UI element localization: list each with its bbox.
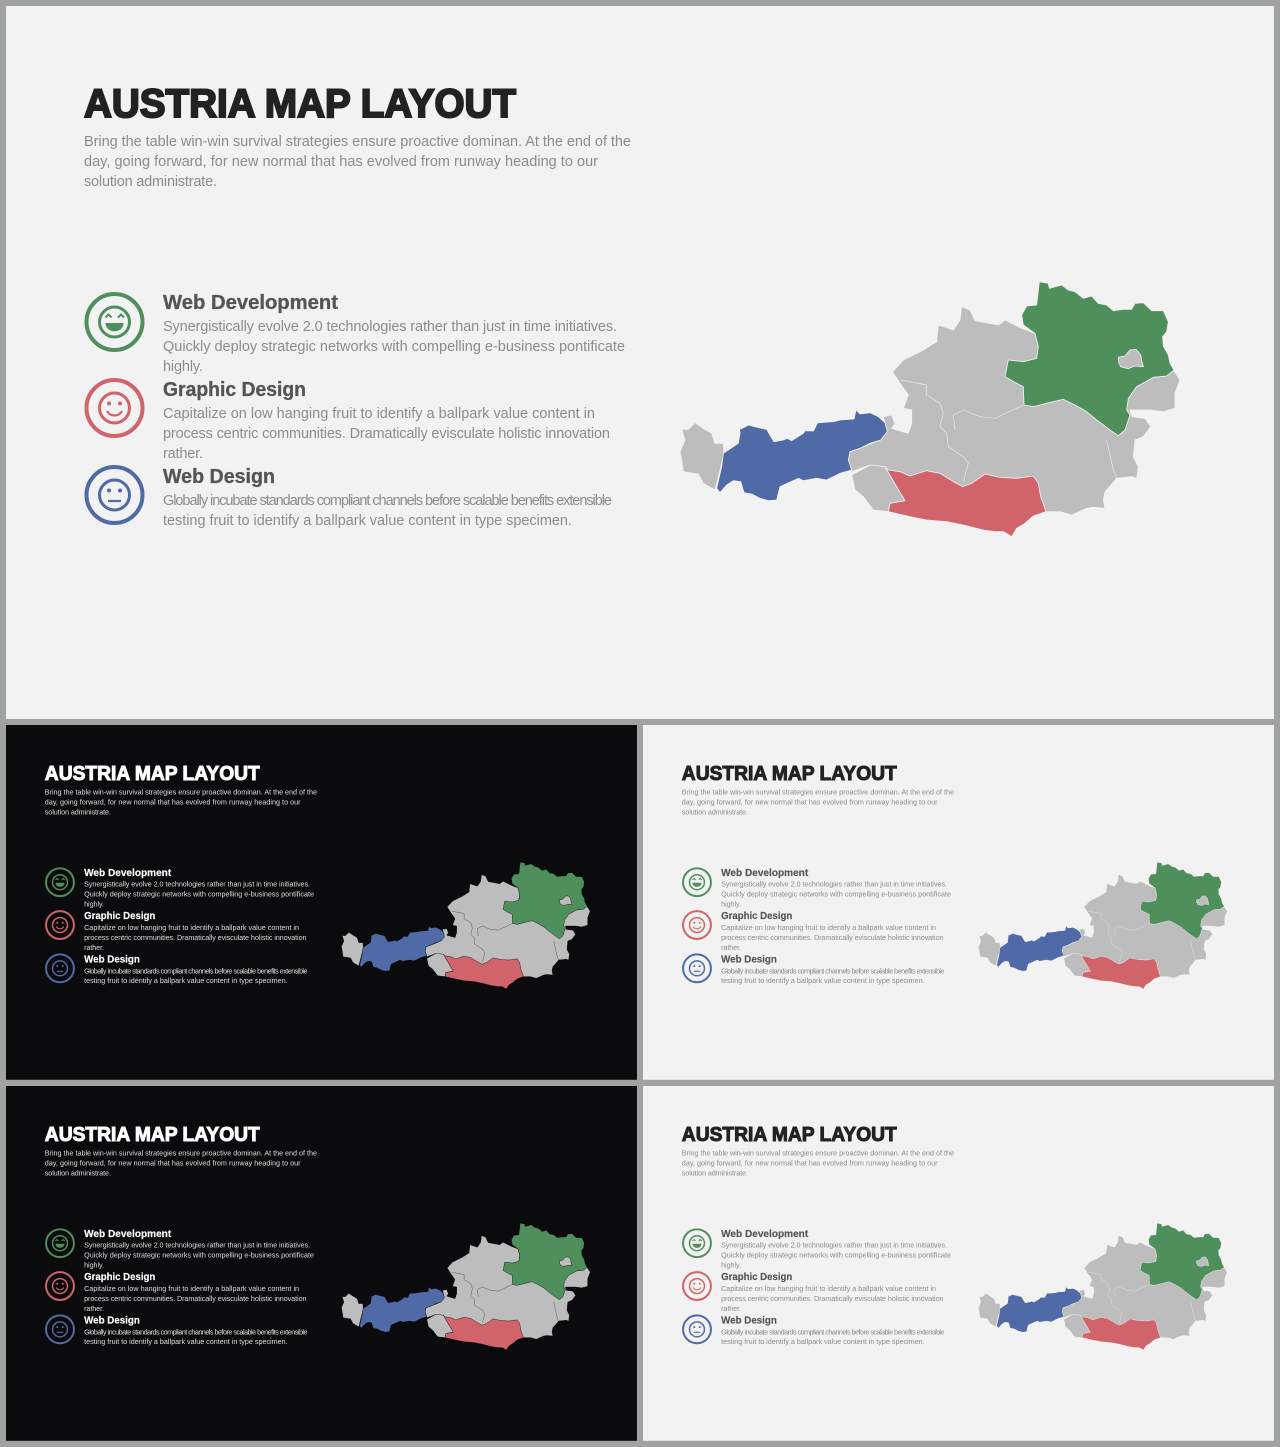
item: graphic design: rather. <box>84 1304 104 1313</box>
item: web development: highly. <box>163 359 203 375</box>
item: graphic design: process centric communities. Dramatically evisculate holistic innovation <box>84 1294 307 1303</box>
item: web development: Synergistically evolve 2.0 technologies rather than just in time initiatives. <box>163 319 617 335</box>
map of Austria <box>680 282 1180 537</box>
intro text: solution administrate. <box>682 808 748 817</box>
item: web development: Web Development <box>721 868 809 879</box>
intro text: solution administrate. <box>45 808 111 817</box>
icon: laughing face <box>683 1229 711 1257</box>
item: web design: testing fruit to identify a ballpark value content in type specimen. <box>721 1337 925 1346</box>
icon: laughing face <box>46 1229 74 1257</box>
icon: neutral face <box>683 954 711 982</box>
item: web development <box>721 868 951 909</box>
item: web design: Web Design <box>84 1315 140 1326</box>
item: web design: testing fruit to identify a ballpark value content in type specimen. <box>84 976 288 985</box>
intro text: Bring the table win-win survival strategies ensure proactive dominan. At the end of the <box>682 1149 954 1158</box>
map of Austria <box>978 862 1227 989</box>
panel: dark slide top left <box>6 725 637 1080</box>
item: graphic design: process centric communities. Dramatically evisculate holistic innovation <box>721 1294 944 1303</box>
item: web design <box>84 1315 308 1346</box>
item: graphic design: Graphic Design <box>84 911 155 922</box>
item: web design: Globally incubate standards compliant channels before scalable benefits extensible <box>721 1327 945 1336</box>
icon: neutral face <box>46 954 74 982</box>
item: graphic design: rather. <box>721 943 741 952</box>
icon: laughing face <box>46 868 74 896</box>
intro text: solution administrate. <box>84 174 217 190</box>
item: web development: Synergistically evolve 2.0 technologies rather than just in time initiatives. <box>84 880 310 889</box>
item: web development: Web Development <box>163 292 338 314</box>
intro text <box>45 788 317 817</box>
item: graphic design: Capitalize on low hanging fruit to identify a ballpark value content in <box>84 1284 299 1293</box>
icon: smiling face <box>46 1272 74 1300</box>
item: graphic design: Graphic Design <box>163 379 306 401</box>
item: web development: Quickly deploy strategic networks with compelling e-business pontificate <box>84 1251 314 1260</box>
icon: smiling face <box>46 911 74 939</box>
item: web development <box>84 1229 314 1270</box>
item: web development: highly. <box>84 900 104 909</box>
icon: smiling face <box>683 1272 711 1300</box>
intro text <box>682 788 954 817</box>
item: web development: Web Development <box>84 868 172 879</box>
intro text <box>682 1149 954 1178</box>
panel: light slide bottom right <box>643 1086 1274 1441</box>
icon: laughing face <box>683 868 711 896</box>
icon: smiling face <box>86 380 142 436</box>
map of Austria <box>341 862 590 989</box>
item: graphic design: Capitalize on low hanging fruit to identify a ballpark value content in <box>721 1284 936 1293</box>
item: graphic design <box>721 1272 944 1313</box>
intro text: day, going forward, for new normal that has evolved from runway heading to our <box>45 1159 301 1168</box>
intro text: day, going forward, for new normal that has evolved from runway heading to our <box>84 154 598 170</box>
item: graphic design: Graphic Design <box>721 1272 792 1283</box>
item: graphic design: rather. <box>84 943 104 952</box>
item: web design <box>721 1315 945 1346</box>
item: web development: Synergistically evolve 2.0 technologies rather than just in time initiatives. <box>721 880 947 889</box>
panel: main light slide <box>6 6 1274 719</box>
item: web development: highly. <box>721 1261 741 1270</box>
intro text: day, going forward, for new normal that has evolved from runway heading to our <box>45 798 301 807</box>
intro text: Bring the table win-win survival strategies ensure proactive dominan. At the end of the <box>45 788 317 797</box>
item: web development: Web Development <box>721 1229 809 1240</box>
icon: smiling face <box>683 911 711 939</box>
title: AUSTRIA MAP LAYOUT <box>84 82 516 126</box>
item: web development: highly. <box>84 1261 104 1270</box>
item: web design: Globally incubate standards compliant channels before scalable benefits extensible <box>84 1327 308 1336</box>
icon: laughing face <box>86 294 142 350</box>
item: web development: Quickly deploy strategic networks with compelling e-business pontificate <box>721 1251 951 1260</box>
icon: neutral face <box>683 1315 711 1343</box>
item: web design <box>721 954 945 985</box>
item: graphic design: rather. <box>163 446 203 462</box>
item: graphic design: Capitalize on low hanging fruit to identify a ballpark value content in <box>163 406 595 422</box>
item: web design: Globally incubate standards compliant channels before scalable benefits extensible <box>721 966 945 975</box>
item: web development: highly. <box>721 900 741 909</box>
item: web design: Web Design <box>84 954 140 965</box>
intro text <box>45 1149 317 1178</box>
intro text: Bring the table win-win survival strategies ensure proactive dominan. At the end of the <box>45 1149 317 1158</box>
intro text <box>84 134 631 190</box>
item: web development <box>84 868 314 909</box>
intro text: day, going forward, for new normal that has evolved from runway heading to our <box>682 1159 938 1168</box>
item: graphic design: Graphic Design <box>84 1272 155 1283</box>
item: web design: Web Design <box>721 954 777 965</box>
intro text: solution administrate. <box>45 1169 111 1178</box>
item: web design: Globally incubate standards compliant channels before scalable benefits extensible <box>163 493 612 509</box>
item: graphic design: Capitalize on low hanging fruit to identify a ballpark value content in <box>721 923 936 932</box>
intro text: solution administrate. <box>682 1169 748 1178</box>
item: web development <box>163 292 625 375</box>
item: web development: Synergistically evolve 2.0 technologies rather than just in time initiatives. <box>84 1241 310 1250</box>
panel: light slide top right <box>643 725 1274 1080</box>
intro text: Bring the table win-win survival strategies ensure proactive dominan. At the end of the <box>84 134 631 150</box>
item: web design: testing fruit to identify a ballpark value content in type specimen. <box>721 976 925 985</box>
item: web design: Web Design <box>721 1315 777 1326</box>
item: graphic design: Graphic Design <box>721 911 792 922</box>
item: web design: Web Design <box>163 466 275 488</box>
intro text: Bring the table win-win survival strategies ensure proactive dominan. At the end of the <box>682 788 954 797</box>
title: AUSTRIA MAP LAYOUT <box>682 763 897 785</box>
item: graphic design: process centric communities. Dramatically evisculate holistic innovation <box>163 426 610 442</box>
item: graphic design <box>163 379 610 462</box>
item: graphic design <box>721 911 944 952</box>
title: AUSTRIA MAP LAYOUT <box>45 1124 260 1146</box>
item: graphic design <box>84 1272 307 1313</box>
item: web development: Synergistically evolve 2.0 technologies rather than just in time initiatives. <box>721 1241 947 1250</box>
item: web development: Quickly deploy strategic networks with compelling e-business pontificate <box>84 890 314 899</box>
item: web development: Web Development <box>84 1229 172 1240</box>
item: web design <box>84 954 308 985</box>
intro text: day, going forward, for new normal that has evolved from runway heading to our <box>682 798 938 807</box>
item: web design <box>163 466 612 529</box>
title: AUSTRIA MAP LAYOUT <box>45 763 260 785</box>
item: web development: Quickly deploy strategic networks with compelling e-business pontificate <box>163 339 625 355</box>
item: web design: testing fruit to identify a ballpark value content in type specimen. <box>163 513 572 529</box>
item: graphic design: Capitalize on low hanging fruit to identify a ballpark value content in <box>84 923 299 932</box>
item: graphic design <box>84 911 307 952</box>
map of Austria <box>341 1223 590 1350</box>
item: graphic design: rather. <box>721 1304 741 1313</box>
title: AUSTRIA MAP LAYOUT <box>682 1124 897 1146</box>
panel: dark slide bottom left <box>6 1086 637 1441</box>
icon: neutral face <box>86 467 142 523</box>
item: web design: Globally incubate standards compliant channels before scalable benefits extensible <box>84 966 308 975</box>
item: graphic design: process centric communities. Dramatically evisculate holistic innovation <box>84 933 307 942</box>
item: web design: testing fruit to identify a ballpark value content in type specimen. <box>84 1337 288 1346</box>
icon: neutral face <box>46 1315 74 1343</box>
map of Austria <box>978 1223 1227 1350</box>
item: web development <box>721 1229 951 1270</box>
item: graphic design: process centric communities. Dramatically evisculate holistic innovation <box>721 933 944 942</box>
item: web development: Quickly deploy strategic networks with compelling e-business pontificate <box>721 890 951 899</box>
